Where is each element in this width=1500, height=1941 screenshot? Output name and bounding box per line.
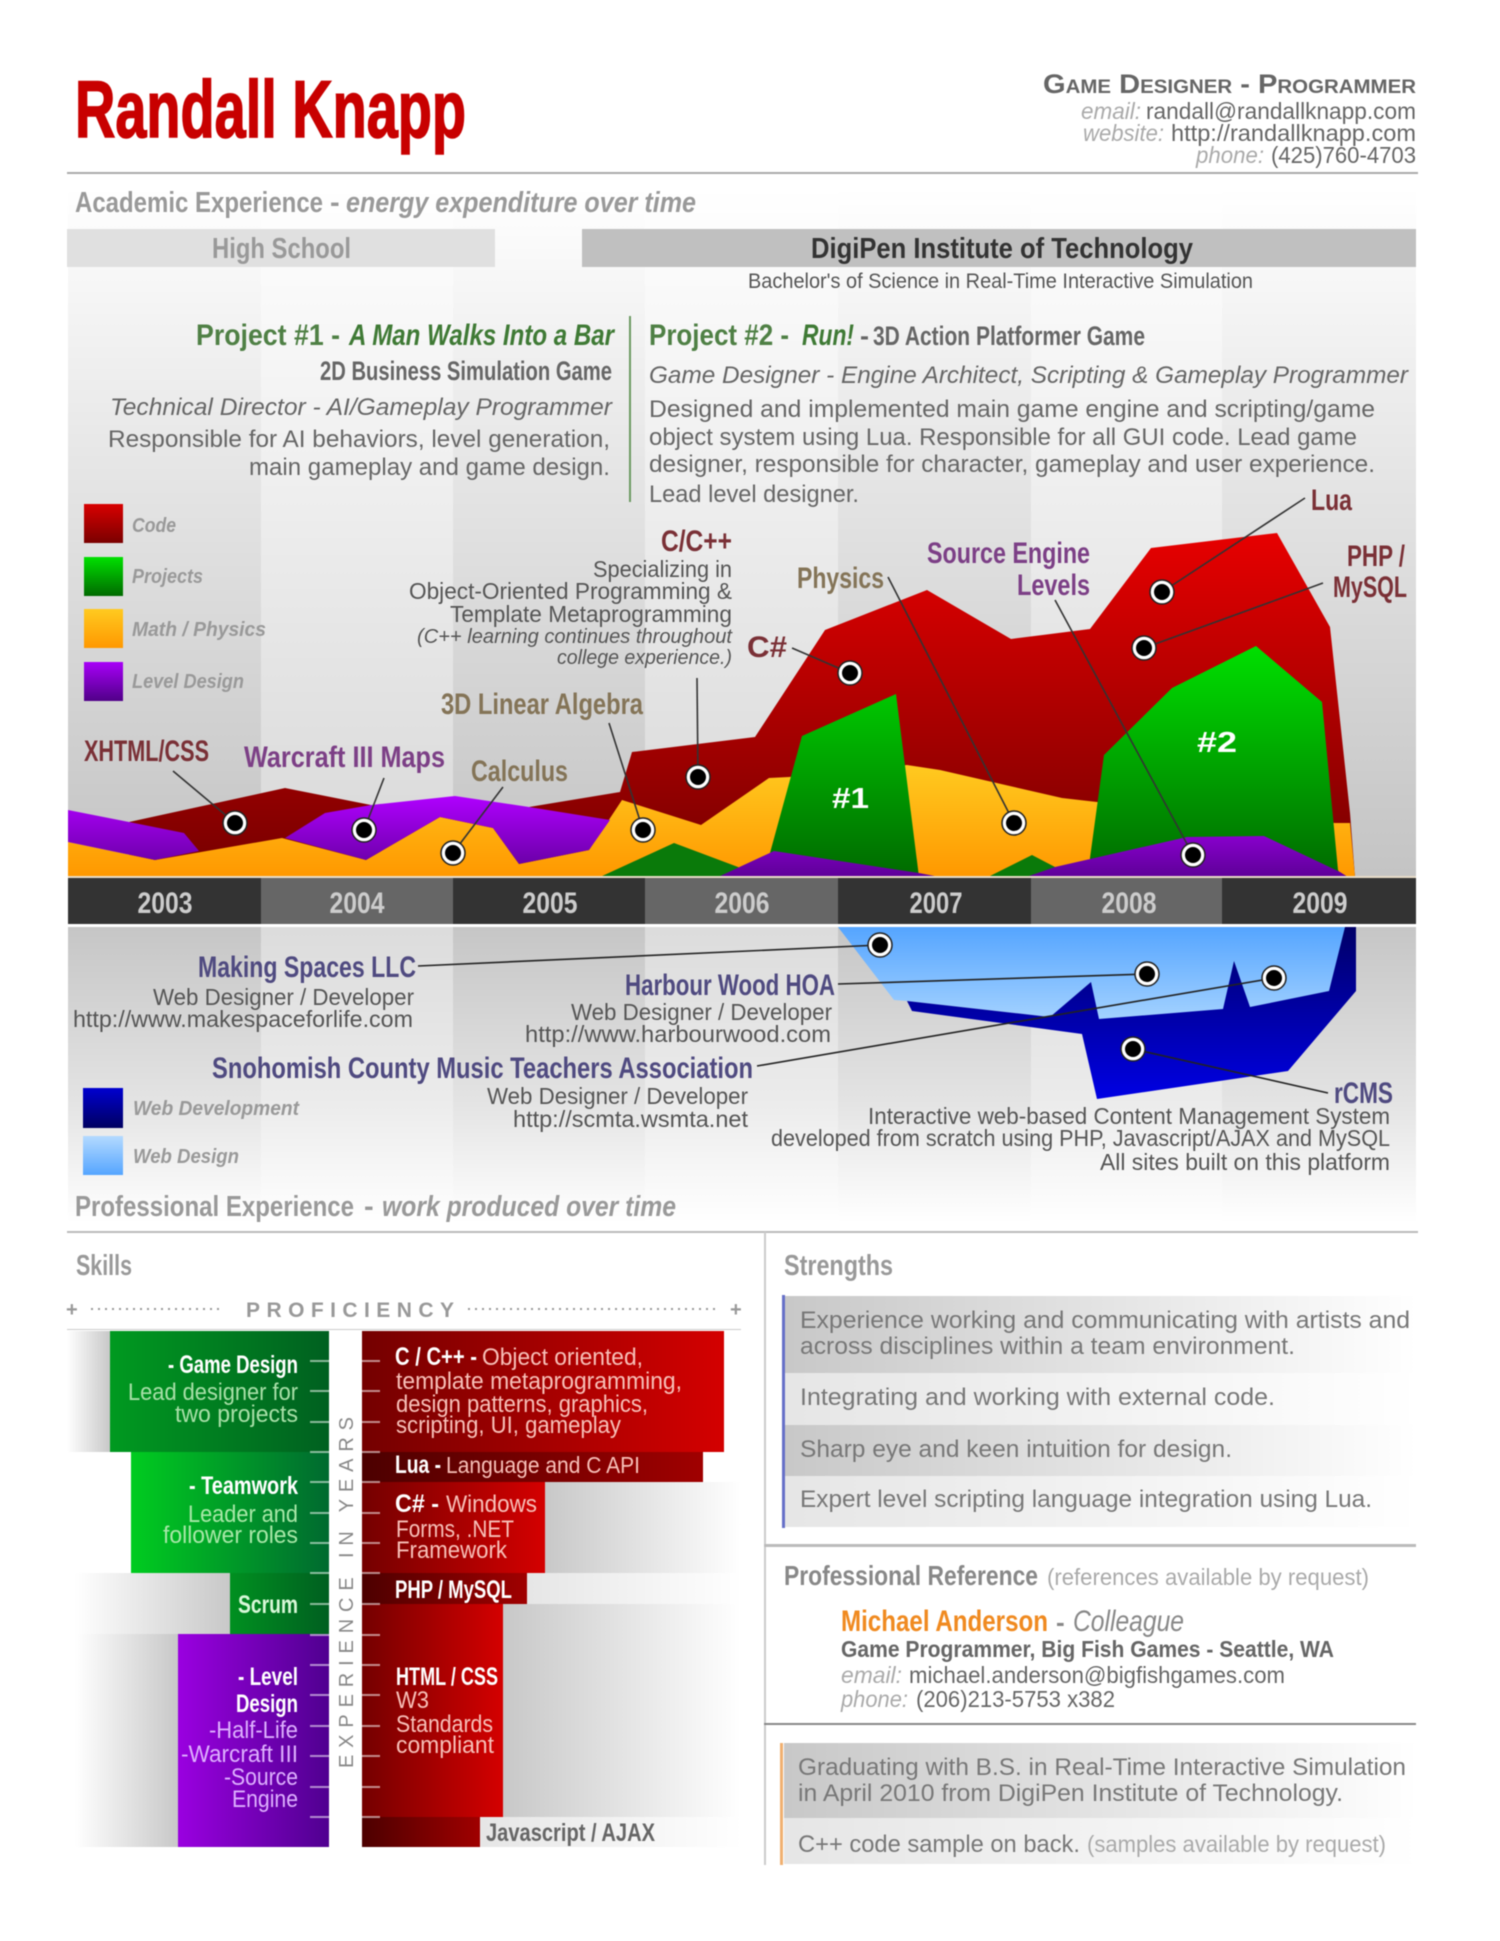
bar: level design: -Warcraft III bbox=[181, 1741, 298, 1768]
years axis ticks bbox=[310, 1360, 380, 1818]
C++ description bbox=[409, 556, 733, 669]
callout: Making Spaces LLC: Making Spaces LLC bbox=[198, 951, 416, 984]
label: Source Engine Levels: Levels bbox=[1017, 569, 1090, 602]
proficiency scale: PROFICIENCY bbox=[246, 1299, 454, 1322]
bar: PHP / MySQL bbox=[362, 1573, 527, 1604]
label: PHP / MySQL bbox=[1333, 540, 1407, 604]
website: http://randallknapp.com bbox=[1171, 120, 1416, 146]
project 1 description bbox=[108, 426, 610, 481]
strength: communication: Experience working and communicating with artists and bbox=[800, 1307, 1410, 1334]
legend item: code bbox=[84, 504, 176, 543]
heading: professional experience bbox=[75, 1191, 676, 1223]
heading: academic experience: - bbox=[330, 187, 340, 219]
bar: scrum bbox=[230, 1573, 329, 1634]
area: web development bbox=[907, 927, 1356, 1099]
high school bar bbox=[67, 229, 495, 267]
heading: professional reference: (references available by request) bbox=[1047, 1564, 1369, 1590]
bar: level design: Engine bbox=[232, 1786, 298, 1813]
area: web design bbox=[838, 927, 1346, 1030]
bar: C / C++: template metaprogramming, bbox=[396, 1368, 682, 1395]
bar: teamwork bbox=[131, 1452, 329, 1573]
phone bbox=[1195, 142, 1416, 168]
heading: professional experience: - bbox=[364, 1191, 374, 1223]
panel: graduation notes bbox=[780, 1743, 1416, 1865]
strength: external code: Integrating and working with external code. bbox=[800, 1384, 1275, 1411]
bars: soft skills bbox=[110, 1331, 329, 1847]
project 1 description: Responsible for AI behaviors, level generation, bbox=[108, 426, 610, 453]
bar: C#: Windows bbox=[446, 1491, 537, 1518]
note: code sample bbox=[798, 1831, 1386, 1858]
strength: design eye: Sharp eye and keen intuition for design. bbox=[800, 1436, 1232, 1463]
label: Source Engine Levels bbox=[927, 537, 1090, 602]
area: math and physics bbox=[68, 765, 1355, 877]
area: small project 2007 bbox=[988, 855, 1075, 877]
callout: Snohomish County Music Teachers Association: Web Designer / Developer bbox=[487, 1083, 748, 1109]
heading: professional reference bbox=[784, 1560, 1369, 1591]
phone: phone: bbox=[1195, 142, 1264, 168]
note: graduation: Graduating with B.S. in Real-Time Interactive Simulation bbox=[798, 1754, 1406, 1781]
axis label: experience in years: EXPERIENCE IN YEARS bbox=[336, 1417, 358, 1768]
bar: level design bbox=[178, 1634, 329, 1847]
reference position: Game Programmer, Big Fish Games - Seattle, WA bbox=[841, 1636, 1334, 1662]
bar: C / C++: Object oriented, bbox=[482, 1344, 643, 1371]
project 2 description: Designed and implemented main game engine and scripting/game bbox=[649, 396, 1375, 423]
bar: game design: Lead designer for bbox=[128, 1379, 298, 1406]
label: 3D Linear Algebra: 3D Linear Algebra bbox=[441, 688, 643, 721]
project 2 description: Lead level designer. bbox=[649, 481, 859, 508]
callout: Snohomish County Music Teachers Association bbox=[212, 1052, 753, 1132]
timeline year bar: 2007 bbox=[910, 887, 962, 920]
legend item: level design: Level Design bbox=[132, 671, 244, 693]
heading: skills: Skills bbox=[76, 1250, 132, 1282]
project 2 heading bbox=[649, 319, 1145, 352]
label: Warcraft III Maps: Warcraft III Maps bbox=[244, 741, 445, 774]
label: Source Engine Levels: Source Engine bbox=[927, 537, 1090, 570]
strength: communication: across disciplines within a team environment. bbox=[800, 1333, 1295, 1360]
legend item: math physics bbox=[84, 609, 266, 648]
bar: C / C++ bbox=[362, 1331, 724, 1452]
area chart: professional web work bbox=[838, 927, 1356, 1099]
degree: Bachelor's of Science in Real-Time Interactive Simulation bbox=[748, 270, 1253, 293]
panel: professional chart background bands bbox=[68, 927, 1416, 1222]
legend item: web development: Web Development bbox=[133, 1098, 300, 1120]
reference name: Michael Anderson bbox=[841, 1605, 1048, 1638]
C++ description: college experience.) bbox=[557, 647, 732, 669]
project 1 heading: Project #1 - bbox=[196, 319, 340, 352]
leader lines: professional chart bbox=[418, 945, 1328, 1093]
project 1 description: main gameplay and game design. bbox=[249, 454, 610, 481]
bar: C / C++: design patterns, graphics, bbox=[396, 1391, 648, 1418]
project divider bbox=[629, 316, 631, 502]
header rule bbox=[67, 172, 1418, 174]
bar: Lua: Lua - bbox=[395, 1451, 441, 1479]
reference phone: (206)213-5753 x382 bbox=[916, 1686, 1115, 1712]
digipen bar: DigiPen Institute of Technology bbox=[811, 233, 1193, 265]
project 2 role: Game Designer - Engine Architect, Scripting & Gameplay Programmer bbox=[649, 362, 1409, 389]
bar: C#: Framework bbox=[396, 1537, 508, 1564]
legend item: code: Code bbox=[132, 515, 176, 537]
legend item: math physics: Math / Physics bbox=[132, 619, 266, 641]
legend item: web design: Web Design bbox=[133, 1146, 239, 1168]
timeline year bar: 2005 bbox=[522, 887, 578, 920]
area: level design 2006-2007 bbox=[718, 851, 940, 877]
skill background fades bbox=[67, 1331, 741, 1847]
note: graduation: in April 2010 from DigiPen Institute of Technology. bbox=[798, 1780, 1343, 1807]
label: project 2 marker: #2 bbox=[1197, 727, 1237, 759]
C++ description: Template Metaprogramming bbox=[450, 601, 732, 627]
bar: game design: - Game Design bbox=[168, 1351, 298, 1379]
callout: Snohomish County Music Teachers Association: Snohomish County Music Teachers Association bbox=[212, 1052, 753, 1085]
job title: Game Designer - Programmer bbox=[1043, 69, 1416, 99]
label: Calculus: Calculus bbox=[471, 755, 568, 788]
bar: PHP / MySQL: PHP / MySQL bbox=[395, 1576, 512, 1604]
project 1 subtitle: 2D Business Simulation Game bbox=[320, 356, 612, 386]
heading: professional experience: Professional Experience bbox=[75, 1191, 354, 1223]
bar: HTML / CSS: Standards bbox=[396, 1711, 493, 1738]
label: PHP / MySQL: MySQL bbox=[1333, 571, 1407, 604]
callout: rCMS: rCMS bbox=[1334, 1077, 1393, 1110]
chart labels: academic bbox=[84, 484, 1407, 788]
note: code sample: (samples available by request) bbox=[1087, 1831, 1386, 1857]
bar: game design: two projects bbox=[175, 1401, 298, 1428]
bars: technical skills bbox=[362, 1331, 724, 1847]
heading: academic experience bbox=[75, 187, 696, 219]
rule above reference bbox=[764, 1544, 1416, 1547]
bar: game design bbox=[110, 1331, 329, 1452]
timeline year bar: 2009 bbox=[1292, 887, 1348, 920]
area: small project 2006 bbox=[600, 843, 755, 877]
bar: Lua: Language and C API bbox=[446, 1452, 640, 1478]
project 2 description bbox=[649, 396, 1375, 508]
column divider bbox=[764, 1232, 766, 1865]
note: code sample: C++ code sample on back. bbox=[798, 1831, 1080, 1858]
area: level design 2004-2005 bbox=[285, 796, 610, 864]
callout: rCMS: developed from scratch using PHP, Javascript/AJAX and MySQL bbox=[771, 1125, 1390, 1151]
markers: academic chart dots bbox=[223, 580, 1205, 867]
bar: C / C++: scripting, UI, gameplay bbox=[396, 1412, 621, 1439]
bar: Javascript / AJAX bbox=[362, 1817, 655, 1847]
project 1 heading: A Man Walks Into a Bar bbox=[348, 319, 616, 352]
C++ description: Object-Oriented Programming & bbox=[409, 578, 732, 604]
high school bar: High School bbox=[212, 233, 351, 265]
legend item: projects: Projects bbox=[132, 566, 203, 588]
project 2 heading: 3D Action Platformer Game bbox=[873, 321, 1145, 351]
callout: Harbour Wood HOA: http://www.harbourwood.com bbox=[525, 1021, 831, 1047]
markers: professional chart dots bbox=[868, 933, 1286, 1061]
reference email: email: bbox=[841, 1662, 902, 1688]
project 2 heading: Project #2 - bbox=[649, 319, 789, 352]
area: project 1 bbox=[769, 694, 919, 877]
heading: professional reference: Professional Reference bbox=[784, 1560, 1038, 1591]
label: project 1 marker: #1 bbox=[832, 783, 869, 815]
strength: communication bbox=[800, 1307, 1410, 1360]
bar: Lua bbox=[362, 1451, 703, 1482]
project 2 heading: Run! bbox=[802, 319, 854, 352]
timeline year bar: 2008 bbox=[1102, 887, 1156, 920]
project 2 text bbox=[649, 319, 1409, 508]
C++ description: (C++ learning continues throughout bbox=[417, 626, 733, 648]
callout: Harbour Wood HOA: Web Designer / Developer bbox=[571, 999, 832, 1025]
reference phone: phone: bbox=[840, 1686, 908, 1712]
label: C/C++: C/C++ bbox=[661, 525, 732, 558]
heading: academic experience: Academic Experience bbox=[75, 187, 323, 219]
bar: level design: Design bbox=[236, 1690, 298, 1718]
area chart: academic energy expenditure bbox=[68, 533, 1416, 878]
digipen bar bbox=[582, 229, 1416, 267]
label: Physics: Physics bbox=[797, 562, 884, 595]
legend: web work bbox=[83, 1088, 300, 1175]
timeline year bar bbox=[68, 878, 1416, 924]
area: level design 2008 bbox=[1026, 836, 1348, 877]
panel: strengths list bbox=[782, 1295, 1415, 1528]
project 1 heading bbox=[196, 319, 616, 352]
area: level design 2003 bbox=[68, 810, 199, 860]
panel: professional reference bbox=[784, 1560, 1369, 1712]
heading: professional experience: work produced over time bbox=[382, 1191, 676, 1223]
callout: Making Spaces LLC: Web Designer / Developer bbox=[153, 984, 414, 1010]
bar: Javascript / AJAX: Javascript / AJAX bbox=[486, 1819, 655, 1847]
callout: Making Spaces LLC bbox=[73, 951, 416, 1032]
email: randall@randallknapp.com bbox=[1146, 98, 1416, 124]
phone: (425)760-4703 bbox=[1271, 142, 1416, 168]
callout: Harbour Wood HOA bbox=[525, 969, 835, 1047]
bar: C#: C# - bbox=[395, 1490, 439, 1518]
area: project 2 bbox=[1090, 646, 1342, 877]
legend item: level design bbox=[84, 662, 244, 701]
bar: C# bbox=[362, 1482, 545, 1573]
bar: level design: -Half-Life bbox=[209, 1717, 298, 1744]
project 2 heading: - bbox=[860, 321, 869, 351]
timeline year bar: 2003 bbox=[138, 887, 192, 920]
email: email: bbox=[1081, 98, 1141, 124]
timeline year bar: 2006 bbox=[714, 887, 770, 920]
panel: academic chart background bands bbox=[68, 190, 1416, 878]
reference name: - bbox=[1056, 1607, 1065, 1637]
proficiency scale: + bbox=[66, 1299, 78, 1321]
project 1 text bbox=[108, 319, 616, 481]
heading: strengths: Strengths bbox=[784, 1250, 893, 1282]
heading: academic experience: energy expenditure over time bbox=[346, 187, 696, 219]
reference name: Colleague bbox=[1073, 1605, 1184, 1638]
legend item: web design bbox=[83, 1136, 239, 1175]
legend item: projects bbox=[84, 557, 203, 596]
bar: HTML / CSS bbox=[362, 1604, 503, 1817]
legend item: web development bbox=[83, 1088, 300, 1128]
bar: teamwork: - Teamwork bbox=[189, 1472, 298, 1500]
project 2 description: object system using Lua. Responsible for all GUI code. Lead game bbox=[649, 424, 1357, 451]
bar: teamwork: Leader and bbox=[188, 1501, 298, 1528]
reference email: michael.anderson@bigfishgames.com bbox=[909, 1662, 1285, 1688]
bar: level design: - Level bbox=[238, 1663, 298, 1691]
section rule bbox=[67, 1231, 1418, 1233]
strength: scripting: Expert level scripting language integration using Lua. bbox=[800, 1486, 1372, 1513]
callout: rCMS: Interactive web-based Content Management System bbox=[868, 1103, 1390, 1129]
callout: Making Spaces LLC: http://www.makespaceforlife.com bbox=[73, 1006, 413, 1032]
bar: C#: Forms, .NET bbox=[396, 1516, 514, 1543]
contact block bbox=[1043, 69, 1416, 168]
rule below reference bbox=[764, 1723, 1416, 1725]
note: graduation bbox=[798, 1754, 1406, 1807]
bar: HTML / CSS: HTML / CSS bbox=[396, 1663, 498, 1691]
bar: HTML / CSS: compliant bbox=[396, 1732, 494, 1759]
label: XHTML/CSS: XHTML/CSS bbox=[84, 735, 209, 768]
title: Randall Knapp bbox=[75, 65, 466, 155]
chart baseline bbox=[68, 876, 1416, 878]
legend: academic skills bbox=[84, 504, 266, 701]
label: Lua: Lua bbox=[1311, 484, 1352, 517]
bar: teamwork: follower roles bbox=[163, 1522, 298, 1549]
bar: C / C++: C / C++ - bbox=[395, 1343, 477, 1371]
callout: rCMS bbox=[771, 1077, 1393, 1175]
bar: scrum: Scrum bbox=[238, 1591, 298, 1619]
area: code bbox=[129, 533, 1355, 877]
bar: HTML / CSS: W3 bbox=[396, 1687, 429, 1714]
callout: Harbour Wood HOA: Harbour Wood HOA bbox=[625, 969, 835, 1002]
label: PHP / MySQL: PHP / bbox=[1347, 540, 1405, 573]
bar: level design: -Source bbox=[224, 1764, 298, 1791]
leader lines: academic chart bbox=[173, 498, 1323, 855]
project 1 role: Technical Director - AI/Gameplay Programmer bbox=[110, 394, 613, 421]
callout: rCMS: All sites built on this platform bbox=[1100, 1149, 1390, 1175]
proficiency scale: + bbox=[730, 1299, 742, 1321]
timeline year bar: 2004 bbox=[330, 887, 385, 920]
callout: Snohomish County Music Teachers Association: http://scmta.wsmta.net bbox=[513, 1106, 749, 1132]
proficiency scale bbox=[66, 1299, 742, 1330]
label: C#: C# bbox=[747, 631, 787, 664]
website: website: bbox=[1083, 120, 1164, 146]
project 2 description: designer, responsible for character, gameplay and user experience. bbox=[649, 451, 1375, 478]
C++ description: Specializing in bbox=[593, 556, 732, 582]
